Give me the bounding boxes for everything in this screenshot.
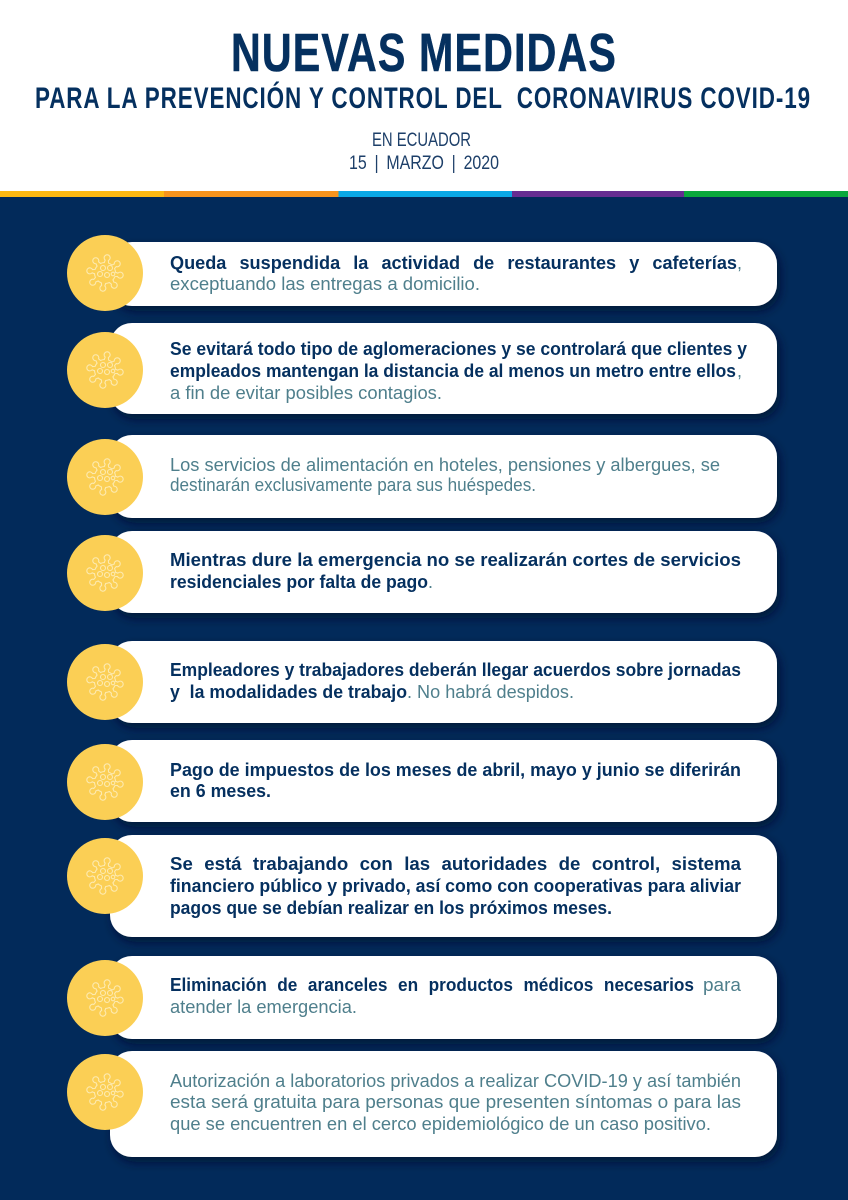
icon: virus badge 9 xyxy=(67,1054,143,1130)
text: measure 4: residenciales por falta de pago xyxy=(170,572,428,592)
text: measure 2: , xyxy=(737,361,742,381)
text: measure 4: Mientras dure la emergencia no se realizarán cortes de servicios xyxy=(170,550,741,570)
title: NUEVAS MEDIDAS xyxy=(231,23,617,83)
text: measure 9: que se encuentren en el cerco epidemiológico de un caso positivo. xyxy=(170,1114,711,1134)
text: measure 3 xyxy=(170,455,720,495)
text: measure 1: Queda suspendida la actividad de restaurantes y cafeterías xyxy=(170,253,737,273)
icon: virus badge 6 xyxy=(67,744,143,820)
text: measure 9: Autorización a laboratorios privados a realizar COVID-19 y así también xyxy=(170,1071,741,1091)
icon: virus badge 1 xyxy=(67,235,143,311)
text: measure 7: Se está trabajando con las autoridades de control, sistema xyxy=(170,854,742,874)
text: measure 2: Se evitará todo tipo de aglomeraciones y se controlará que clientes y xyxy=(170,339,747,359)
text: measure 1 xyxy=(170,253,742,294)
text: measure 6 xyxy=(170,760,741,801)
date: 15 | MARZO | 2020 xyxy=(349,153,499,174)
text: measure 3: Los servicios de alimentación en hoteles, pensiones y albergues, se xyxy=(170,455,720,475)
text: measure 3: destinarán exclusivamente para sus huéspedes. xyxy=(170,475,536,495)
text: measure 8: Eliminación de aranceles en productos médicos necesarios xyxy=(170,975,694,995)
text: measure 4: . xyxy=(428,572,433,592)
icon: virus badge 8 xyxy=(67,960,143,1036)
icon: virus badge 2 xyxy=(67,332,143,408)
text: measure 5: Empleadores y trabajadores deberán llegar acuerdos sobre jornadas xyxy=(170,660,741,680)
text: measure 6: Pago de impuestos de los meses de abril, mayo y junio se diferirán xyxy=(170,760,741,780)
panel: measure 8 xyxy=(67,956,777,1039)
text: measure 5: y la modalidades de trabajo xyxy=(170,682,407,702)
icon: virus badge 4 xyxy=(67,535,143,611)
text: measure 4 xyxy=(170,550,741,592)
panel: measure 4 xyxy=(67,531,777,613)
text: measure 2: empleados mantengan la distancia de al menos un metro entre ellos xyxy=(170,361,736,381)
panel: measure 3 xyxy=(67,435,777,518)
colour band xyxy=(0,191,848,197)
panel: measure 9 xyxy=(67,1051,777,1157)
panel: measure 2 xyxy=(67,323,777,414)
text: measure 9 xyxy=(170,1071,741,1134)
icon: virus badge 3 xyxy=(67,439,143,515)
panel: measure 5 xyxy=(67,641,777,723)
panel: measure 7 xyxy=(67,835,777,937)
text: measure 8: atender la emergencia. xyxy=(170,997,357,1017)
text: measure 9: esta será gratuita para personas que presenten síntomas o para las xyxy=(170,1092,741,1112)
text: measure 2 xyxy=(170,339,747,403)
text: measure 1: , xyxy=(737,253,742,273)
panel: measure 1 xyxy=(67,235,777,311)
panel: measure 6 xyxy=(67,740,777,822)
text: measure 5: . No habrá despidos. xyxy=(407,682,574,702)
text: measure 7: pagos que se debían realizar en los próximos meses. xyxy=(170,898,612,918)
text: measure 7: financiero público y privado, así como con cooperativas para aliviar xyxy=(170,876,741,896)
text: measure 2: a fin de evitar posibles contagios. xyxy=(170,383,442,403)
icon: virus badge 7 xyxy=(67,838,143,914)
icon: virus badge 5 xyxy=(67,644,143,720)
text: measure 6: en 6 meses. xyxy=(170,781,271,801)
location: EN ECUADOR xyxy=(372,130,471,151)
text: measure 8: para xyxy=(703,975,742,995)
text: measure 5 xyxy=(170,660,741,702)
text: measure 7 xyxy=(170,854,742,918)
text: measure 8 xyxy=(170,975,742,1017)
text: measure 1: exceptuando las entregas a domicilio. xyxy=(170,274,480,294)
